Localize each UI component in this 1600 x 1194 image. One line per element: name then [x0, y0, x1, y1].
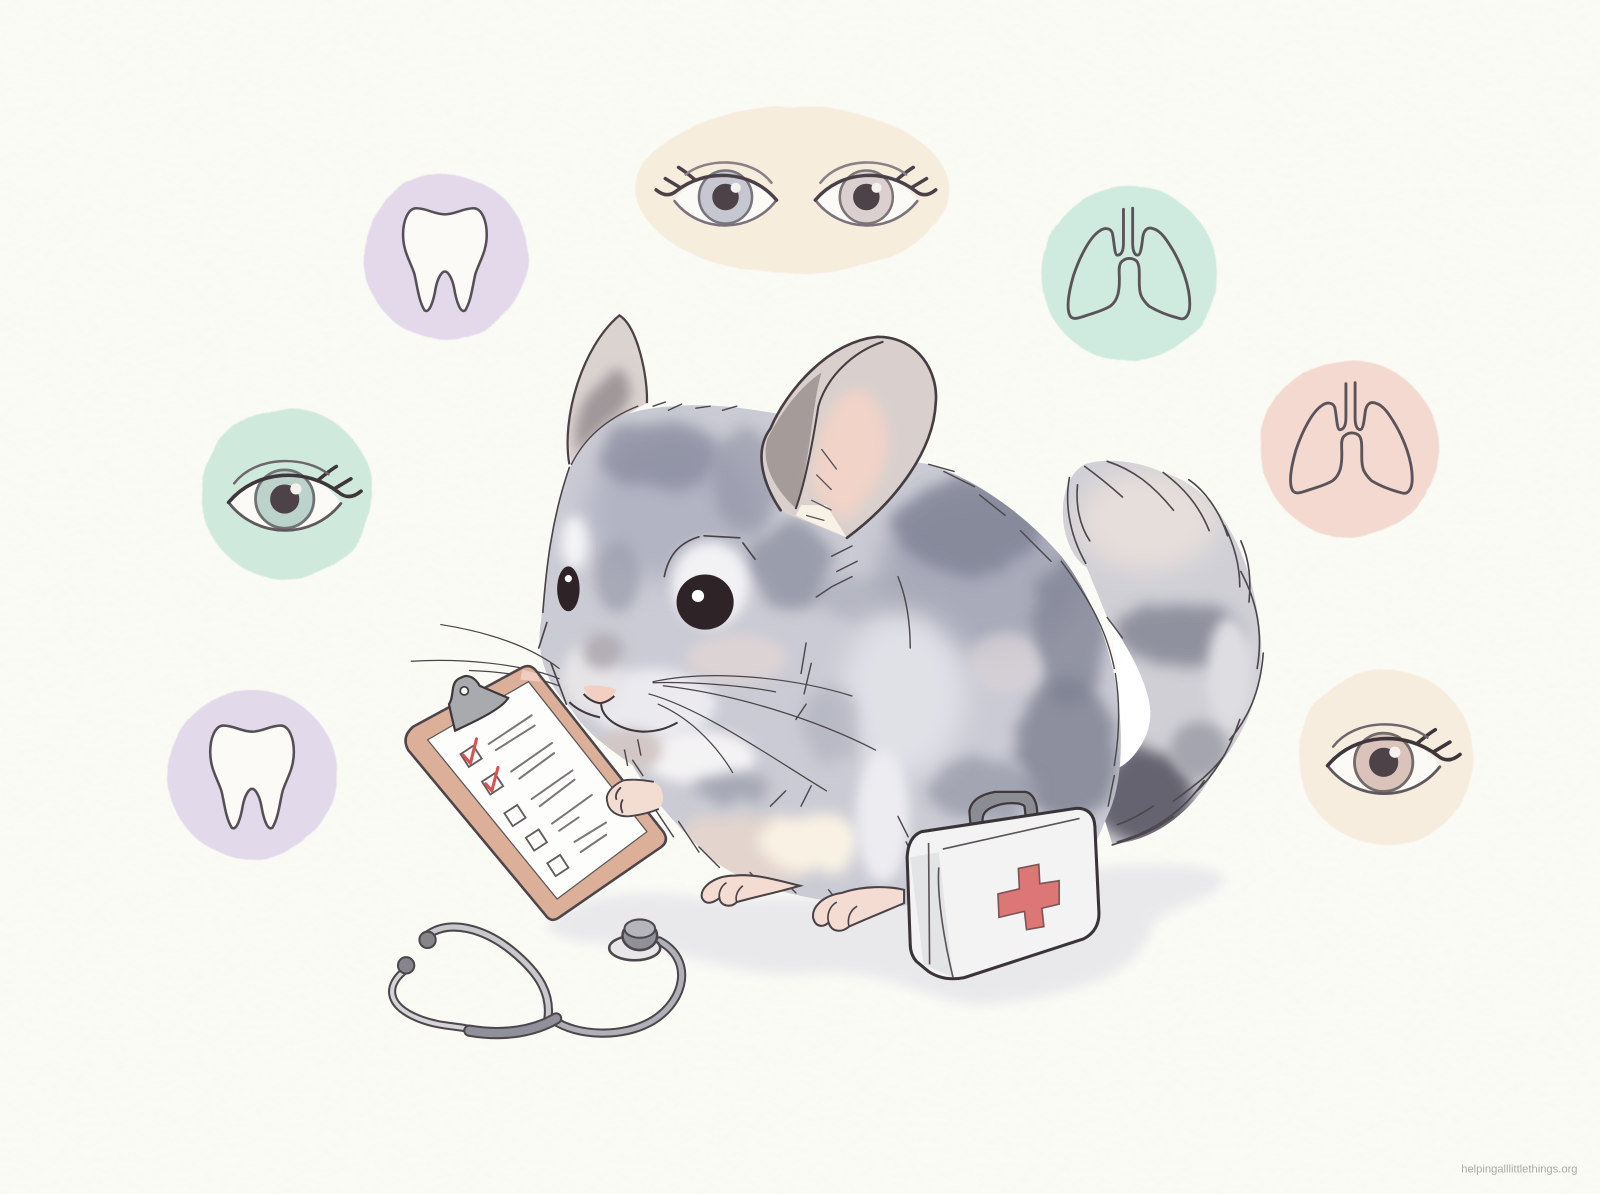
icon: two eyes on beige oval	[637, 106, 949, 274]
gap between body and tail	[1107, 617, 1150, 767]
chinchilla body and head	[539, 402, 1122, 906]
chinchilla nose and mouth	[569, 685, 678, 732]
paper sheet	[428, 682, 647, 899]
red cross	[998, 864, 1059, 930]
kit handle	[969, 792, 1037, 837]
clip	[449, 676, 508, 731]
chinchilla tail	[1063, 461, 1263, 845]
ground shadow	[546, 864, 1224, 1005]
icon: tooth on purple circle, lower	[167, 690, 337, 859]
checkboxes	[461, 746, 568, 876]
chinchilla paw holding clipboard	[607, 780, 663, 816]
chinchilla front foot right	[813, 887, 904, 931]
chinchilla eyes	[557, 566, 734, 630]
icon: left eye of pair	[656, 162, 777, 225]
icon: right eye of pair	[815, 162, 936, 225]
icon: eye on mint circle	[201, 408, 372, 580]
watermark: helpingalllittlethings.org	[1461, 1164, 1578, 1176]
clipboard with checklist	[406, 666, 666, 920]
icon: eye on beige circle	[1298, 669, 1473, 845]
chinchilla whiskers	[411, 625, 876, 791]
tail fur strokes	[1068, 461, 1263, 845]
chinchilla right ear	[762, 337, 936, 538]
checklist lines	[489, 715, 606, 852]
chinchilla front foot left	[702, 875, 800, 906]
icon: tooth on purple circle, top	[363, 175, 529, 340]
kit case	[907, 808, 1099, 979]
chinchilla left ear	[568, 315, 647, 464]
first aid kit	[907, 792, 1099, 979]
fur ticks	[571, 402, 1122, 903]
icon: lungs on mint circle	[1041, 186, 1216, 361]
red check marks	[463, 739, 498, 791]
stethoscope	[392, 919, 682, 1033]
icon: lungs on pink circle	[1261, 360, 1439, 538]
illustration: chinchilla health check	[166, 106, 1577, 1175]
